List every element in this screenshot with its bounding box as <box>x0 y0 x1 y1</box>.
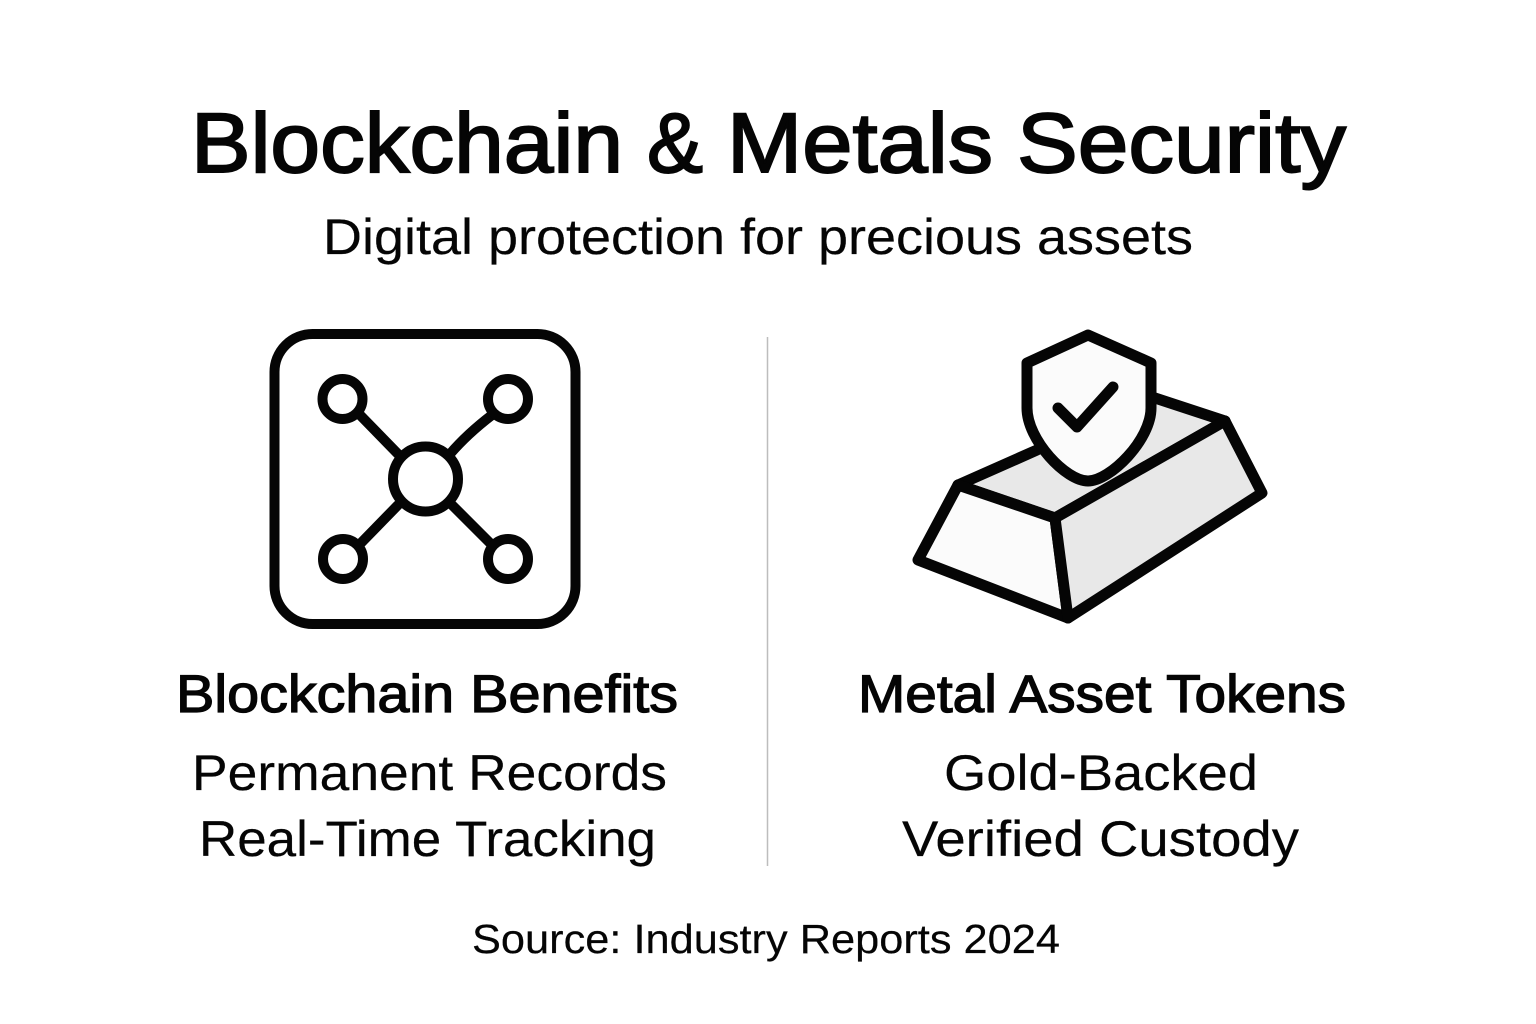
icon: blockchain network <box>274 334 576 624</box>
text: gold-backed: Gold-Backed <box>944 745 1258 801</box>
panel: metal asset tokens <box>858 335 1346 867</box>
title: Blockchain <box>191 96 623 190</box>
title <box>191 96 1346 190</box>
title: Metals <box>727 96 993 190</box>
icon: gold bar with shield <box>918 335 1262 618</box>
heading: metal asset tokens: Metal Asset Tokens <box>858 665 1346 724</box>
panel: blockchain benefits <box>176 334 678 867</box>
divider <box>766 337 768 866</box>
text: permanent records: Permanent Records <box>192 745 667 801</box>
title: Security <box>1017 96 1346 190</box>
text: real-time tracking: Real-Time Tracking <box>199 811 656 867</box>
text: verified custody: Verified Custody <box>902 811 1299 867</box>
source note: Source: Industry Reports 2024 <box>472 916 1060 962</box>
title: & <box>647 96 703 190</box>
subtitle: Digital protection for precious assets <box>323 209 1193 265</box>
heading: blockchain benefits: Blockchain Benefits <box>176 665 678 724</box>
